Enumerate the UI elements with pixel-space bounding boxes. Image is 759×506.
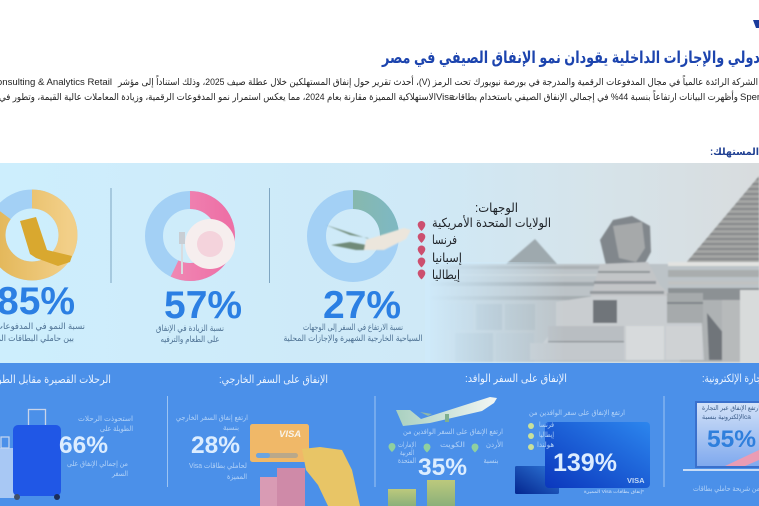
panel: consumer trends — [0, 163, 759, 363]
card: 139 percent: ارتفع الإنفاق على سفر الوافدين من — [529, 408, 625, 417]
sphinx body tiers — [590, 262, 676, 310]
stat: 55 percent: الإلكترونية بنسبة — [702, 414, 744, 421]
stat: 27 percent: السياحية الخارجية الشهيرة والإجازات المحلية — [284, 333, 422, 344]
stat: 28 percent: بنسبة — [223, 423, 239, 432]
stat: 35 percent: 35% — [418, 454, 467, 481]
card: 139 percent: هولندا — [537, 440, 554, 449]
sphinx head — [600, 216, 651, 265]
lower left stones — [445, 304, 473, 330]
stat: 57 percent: 57% — [164, 284, 242, 327]
heading: الإنفاق على السفر الوافد: — [465, 373, 567, 385]
card: 139 percent: VISA — [627, 476, 645, 485]
donut: 85 percent payments — [0, 199, 72, 271]
icon: payment card: VISA — [279, 429, 301, 440]
destinations list: فرنسا — [432, 233, 457, 248]
illustration: sphinx and pyramids — [430, 176, 759, 362]
inbound origin markets: الأردن — [486, 439, 503, 449]
destinations list: الولايات المتحدة الأمريكية — [432, 215, 551, 231]
card: 139 percent: فرنسا — [539, 420, 554, 429]
stat: 66 percent: السفر — [111, 469, 128, 478]
card: 139 percent: *إنفاق بطاقات Visa المميزة — [584, 489, 644, 495]
stat: 28 percent: 28% — [191, 432, 240, 459]
icons: green pins — [388, 443, 478, 452]
panel: spending breakdown — [0, 363, 759, 506]
stat: 66 percent: 66% — [59, 432, 108, 459]
destinations list: إسبانيا — [432, 251, 462, 265]
icon: laptop — [683, 401, 759, 471]
intro paragraph: وأظهرت البيانات ارتفاعاً بنسبة 44% في إجمالي الإنفاق الصيفي باستخدام بطاقات — [450, 90, 738, 103]
intro paragraph: الاستهلاكية المميزة مقارنة بعام 2024، مما يعكس استمرار نمو المدفوعات الرقمية، وزيادة المعاملات عالية القيمة، وتطور في — [0, 92, 436, 103]
stat: 57 percent: على الطعام والترفيه — [160, 334, 220, 344]
stat: 66 percent: الطويلة على — [100, 424, 133, 433]
inbound origin markets: الكويت — [440, 440, 465, 449]
card: 139 percent: 139% — [553, 449, 617, 477]
stat: 27 percent — [284, 284, 422, 344]
stat: 28 percent — [176, 413, 248, 481]
destinations list: الوجهات: — [475, 201, 518, 216]
bar chart — [388, 480, 455, 506]
inbound origin markets: بنسبة — [484, 456, 498, 465]
inbound origin markets: المتحدة — [398, 456, 416, 465]
icon: hand — [302, 447, 360, 506]
stat: 66 percent: من إجمالي الإنفاق على — [67, 459, 128, 468]
donut: 27 percent travel — [316, 200, 390, 272]
icon: small suitcase — [0, 437, 19, 498]
stat: 55 percent — [702, 405, 759, 453]
section: outbound travel — [176, 374, 360, 506]
icons: yellow pins — [528, 423, 534, 450]
stat: 85 percent — [0, 280, 85, 344]
inbound origin markets: ارتفع الإنفاق على السفر الوافدين من — [403, 427, 503, 436]
icon: large suitcase — [13, 410, 61, 500]
destinations list — [418, 201, 551, 282]
stat: 28 percent: المميزة — [227, 472, 247, 481]
icon: airplane — [396, 397, 497, 426]
heading: الإنفاق على السفر الخارجي: — [219, 374, 328, 386]
stat: 28 percent: لحاملي بطاقات Visa — [189, 461, 247, 470]
section: short versus long trips — [0, 374, 133, 500]
stat: 66 percent — [59, 414, 133, 478]
stat: 57 percent — [156, 284, 242, 344]
stat: 66 percent: استحوذت الرحلات — [78, 414, 133, 423]
icons: map pins — [418, 221, 425, 280]
card: 139 percent: إيطاليا — [539, 430, 554, 439]
inbound origin markets: العربية — [400, 448, 414, 457]
section: inbound travel — [388, 373, 650, 506]
stat: 27 percent: 27% — [323, 284, 401, 327]
icon: shopping bags — [260, 468, 305, 506]
stat: 27 percent: نسبة الارتفاع في السفر إلى الوجهات — [303, 322, 403, 333]
stat: 55 percent: 55% — [707, 426, 756, 453]
intro paragraph: Visa — [436, 92, 455, 103]
card: 139 percent — [515, 408, 650, 495]
section: e-commerce — [683, 373, 759, 493]
logo fragment — [753, 20, 759, 28]
stat: 57 percent: نسبة الزيادة في الإنفاق — [156, 323, 224, 334]
stat: 55 percent: ca — [744, 414, 751, 421]
icon: payment card — [250, 424, 309, 462]
icon: airplane — [326, 225, 411, 250]
inbound origin markets — [388, 427, 503, 465]
separators — [111, 188, 270, 283]
intro paragraph — [0, 75, 759, 103]
inbound origin markets: الإمارات — [398, 440, 416, 449]
stat: 28 percent: ارتفع إنفاق السفر الخارجي — [176, 413, 248, 422]
donut: 57 percent dining — [154, 200, 235, 274]
destinations list: إيطاليا — [432, 268, 460, 282]
sphinx paws and blocks — [530, 296, 704, 360]
dividers — [168, 396, 664, 487]
